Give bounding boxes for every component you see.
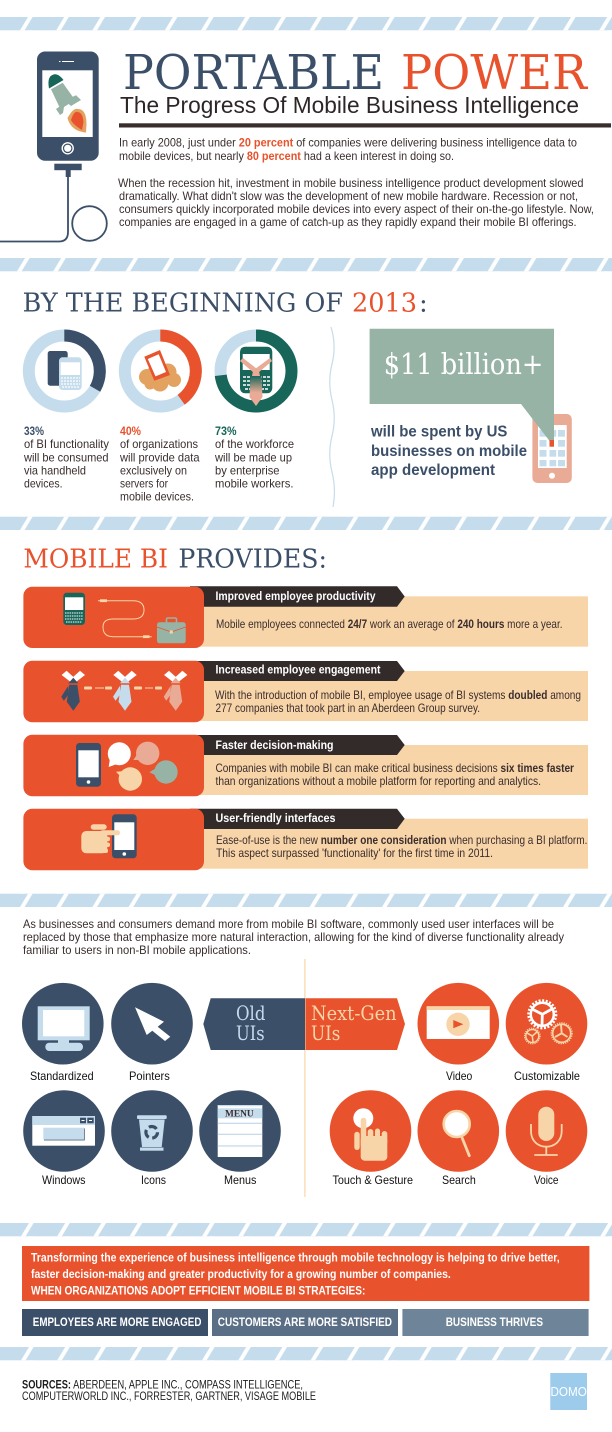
box: customers are more satisfied	[212, 1309, 398, 1336]
text: user interface stat	[216, 833, 587, 860]
panel: increased employee engagement	[23, 661, 588, 722]
stat: 73%	[214, 424, 294, 490]
icon: menu	[199, 1090, 281, 1172]
text: spend on mobile app development: app development	[371, 462, 496, 479]
text: decision-making stat	[216, 761, 574, 788]
heading: by the beginning of 2013: 2013	[352, 289, 417, 319]
label: improved employee productivity: Improved employee productivity	[216, 589, 376, 603]
panel: conclusion: faster decision-making and greater productivity for a growing number of companies.	[31, 1269, 451, 1281]
box: business thrives: BUSINESS THRIVES	[446, 1317, 543, 1329]
text: interface intro: replaced by those that emphasize more natural interaction, allowing for the kind of diverse functionality already	[23, 930, 564, 944]
icon: voice microphone	[506, 1090, 587, 1172]
label: user-friendly interfaces: User-friendly interfaces	[216, 811, 336, 825]
stat: 40%: mobile devices.	[120, 490, 194, 504]
intro text block: mobile devices, but nearly 80 percent had a keen interest in doing so.	[119, 149, 454, 163]
text: interface intro: familiar to users in non-BI mobile applications.	[23, 943, 251, 957]
icon: search magnifier	[418, 1090, 499, 1172]
panel: conclusion: WHEN ORGANIZATIONS ADOPT EFFICIENT MOBILE BI STRATEGIES:	[31, 1286, 365, 1298]
panel: conclusion: Transforming the experience of business intelligence through mobile technology is helping to drive better,	[31, 1252, 560, 1264]
stat: 33%	[23, 424, 109, 490]
icon: salmon phone with app grid	[532, 414, 572, 483]
stat: 40%: of organizations	[120, 437, 198, 451]
chart: 33% donut with handheld devices	[29, 336, 100, 406]
title: POWER	[401, 45, 589, 101]
label: windows: Windows	[42, 1173, 86, 1187]
subtitle: The Progress Of Mobile Business Intelligence	[120, 92, 579, 118]
stat: 73%: by enterprise	[215, 463, 280, 477]
intro text block	[118, 136, 594, 229]
text: user interface stat: Ease-of-use is the new number one consideration when purchasing a BI platform.	[216, 833, 587, 847]
text: productivity stat: Mobile employees connected 24/7 work an average of 240 hours more a year.	[216, 617, 562, 631]
intro text block: companies are engaged in a game of catch-up as they rapidly expand their mobile BI offerings.	[119, 215, 576, 229]
text: engagement stat	[215, 688, 581, 715]
text: spend on mobile app development: businesses on mobile	[371, 443, 527, 460]
intro text block: In early 2008, just under 20 percent of companies were delivering business intelligence data to	[119, 136, 577, 150]
callout: $11 billion: $11 billion+	[384, 347, 543, 381]
logo: domo	[550, 1373, 587, 1410]
text: spend on mobile app development: will be spent by US	[370, 424, 508, 441]
icon: pointer arrow	[111, 983, 193, 1064]
box: business thrives	[402, 1309, 589, 1336]
banner: next-gen UIs	[306, 998, 405, 1050]
stat: 33%: will be consumed	[23, 450, 109, 464]
intro text block: When the recession hit, investment in mobile business intelligence product development slowed	[118, 176, 584, 190]
text: sources	[22, 1377, 316, 1403]
title	[123, 45, 589, 101]
stat: 40%	[119, 424, 200, 504]
label: increased employee engagement: Increased employee engagement	[216, 662, 380, 676]
icon: customizable gears	[506, 983, 587, 1064]
banner: old UIs	[203, 998, 305, 1050]
box: customers are more satisfied: CUSTOMERS ARE MORE SATISFIED	[218, 1317, 392, 1329]
stat: 40%: 40%	[120, 424, 141, 438]
text: spend on mobile app development	[370, 424, 527, 479]
intro text block: dramatically. What didn't slow was the development of new mobile hardware. Recession or not,	[119, 189, 578, 203]
label: touch and gesture: Touch & Gesture	[332, 1173, 413, 1187]
text: decision-making stat: Companies with mobile BI can make critical business decisions six times faster	[216, 761, 574, 775]
stat: 33%: via handheld	[24, 463, 86, 477]
label: video: Video	[446, 1069, 473, 1083]
label: menus: Menus	[224, 1173, 256, 1187]
text: sources: SOURCES: ABERDEEN, APPLE INC., COMPASS INTELLIGENCE,	[22, 1377, 303, 1391]
icon: standardized monitor	[22, 983, 104, 1064]
icon: three ties linked	[61, 671, 187, 711]
banner: old UIs: UIs	[236, 1021, 265, 1045]
heading: mobile bi provides: PROVIDES:	[178, 544, 327, 574]
stat: 73%: 73%	[215, 424, 237, 438]
box: employees are more engaged: EMPLOYEES ARE MORE ENGAGED	[33, 1317, 201, 1329]
label: customizable: Customizable	[514, 1069, 580, 1083]
title: PORTABLE	[123, 45, 384, 101]
text: user interface stat: This aspect surpassed 'functionality' for the first time in 2011.	[216, 846, 493, 860]
label: icons: Icons	[141, 1173, 166, 1187]
icon: recycle bin	[111, 1090, 193, 1172]
stat: 40%: will provide data	[119, 450, 200, 464]
panel: user-friendly interfaces	[23, 809, 588, 870]
icon: windows	[23, 1090, 105, 1172]
icon: smartphone connected to briefcase	[63, 593, 186, 643]
panel: faster decision-making	[23, 735, 588, 796]
heading: mobile bi provides	[23, 544, 327, 574]
text: engagement stat: 277 companies that took part in an Aberdeen Group survey.	[216, 701, 480, 715]
text: interface intro	[23, 917, 564, 957]
stat: 33%: of BI functionality	[24, 437, 109, 451]
banner: old UIs: Old	[236, 1001, 266, 1025]
text: sources: COMPUTERWORLD INC., FORRESTER, GARTNER, VISAGE MOBILE	[22, 1389, 316, 1403]
stat: 73%: mobile workers.	[215, 476, 294, 490]
label: search: Search	[442, 1173, 476, 1187]
chart: 73% donut with smartphone and tie	[220, 336, 292, 406]
text: engagement stat: With the introduction of mobile BI, employee usage of BI systems doubled among	[215, 688, 581, 702]
chart: 40% donut with phone and cloud	[125, 336, 196, 406]
icon: touch and gesture	[330, 1090, 411, 1172]
text: decision-making stat: than organizations without a mobile platform for reporting and analytics.	[216, 774, 541, 788]
icon: menu: MENU	[225, 1110, 254, 1120]
banner: next-gen UIs: UIs	[311, 1021, 340, 1045]
panel: improved employee productivity	[23, 586, 588, 648]
stat: 73%: of the workforce	[215, 437, 294, 451]
text: interface intro: As businesses and consumers demand more from mobile BI software, commonly used user interfaces will be	[23, 917, 554, 931]
panel: conclusion	[22, 1246, 589, 1301]
label: faster decision-making: Faster decision-making	[216, 738, 334, 752]
banner: next-gen UIs: Next-Gen	[311, 1001, 397, 1025]
logo: domo: DOMO	[550, 1385, 587, 1399]
stat: 40%: exclusively on	[120, 463, 187, 477]
label: pointers: Pointers	[129, 1069, 170, 1083]
icon: video player	[418, 983, 499, 1064]
label: standardized: Standardized	[30, 1069, 94, 1083]
heading: by the beginning of 2013: BY THE BEGINNING OF	[23, 289, 343, 319]
icon: phone with speech bubbles	[76, 742, 178, 791]
stat: 73%: will be made up	[214, 450, 292, 464]
label: voice: Voice	[534, 1173, 559, 1187]
heading: mobile bi provides: MOBILE BI	[23, 544, 168, 574]
box: employees are more engaged	[22, 1309, 208, 1336]
stat: 40%: servers for	[120, 476, 168, 490]
stat: 33%: devices.	[24, 476, 62, 490]
heading: by the beginning of 2013: :	[419, 289, 428, 319]
stat: 33%: 33%	[24, 424, 44, 438]
callout: $11 billion	[370, 329, 554, 447]
icon: finger touching phone	[81, 814, 137, 858]
icon: phone with rocket and charging cable	[0, 52, 107, 242]
